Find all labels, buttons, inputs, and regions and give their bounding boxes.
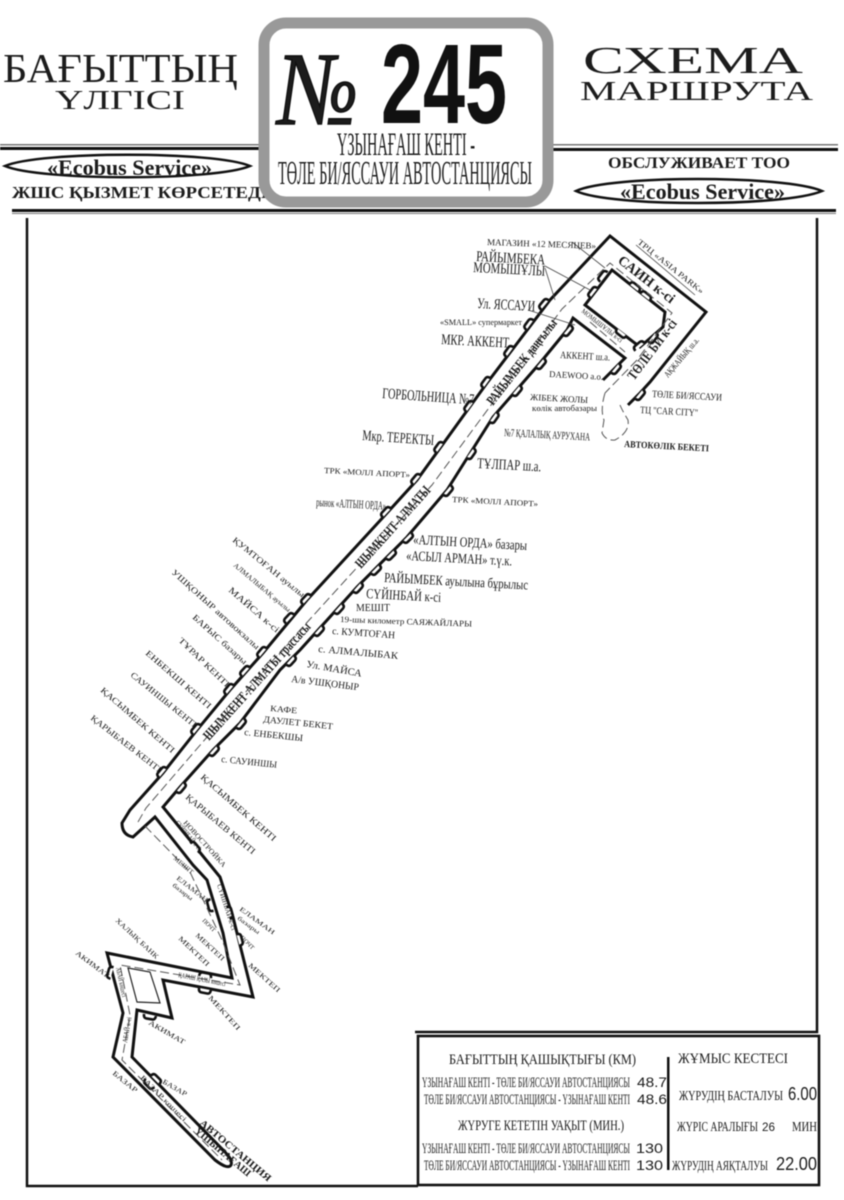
stop labels: central east: КАФЕ [270, 703, 298, 715]
stop labels: southern town: МЕКТЕП [177, 935, 211, 968]
stop labels: north-west upright: «SMALL» супермаркет [440, 318, 523, 327]
table divider [667, 1057, 670, 1170]
header: left title: БАҒЫТТЫҢ [3, 45, 238, 91]
stop labels: southern town: ЕЛАМАН [238, 906, 276, 937]
stop labels: southern town: АКИМАТ [147, 1019, 187, 1047]
header: left title [3, 45, 238, 115]
inner city block [585, 270, 665, 347]
operator badge right (Russian): ОБСЛУЖИВАЕТ ТОО [608, 155, 790, 172]
travel time section: 130 [636, 1140, 663, 1156]
road name: Momyshuly: МОМЫШҰЛЫ к-сі [580, 307, 624, 344]
stop labels: southern town: ПОЧТ [239, 935, 255, 952]
work schedule section: ЖҰМЫС КЕСТЕСІ [678, 1051, 788, 1067]
operator badge left (Kazakh): «Ecobus Service» [47, 155, 212, 180]
stop labels: central east: с. АЛМАЛЫБАК [318, 644, 399, 662]
stop labels: southern town: АВТОСТАНЦИЯ [197, 1118, 274, 1185]
dashed loop to auto station [602, 393, 628, 440]
stop labels: central east: «АЛТЫН ОРДА» базары [413, 533, 528, 554]
stop labels: southern town: ҮШЫНАҒАШ [192, 1126, 253, 1179]
operator badge right (Russian) [576, 155, 822, 204]
stop labels: north-west upright: РАЙЫМБЕКА [476, 248, 546, 269]
stop labels: east upright: ТҰЛПАР ш.а. [477, 456, 542, 475]
stop labels: southern town [74, 819, 282, 1185]
stop labels: southern town: базары [171, 882, 194, 902]
work schedule section: МИН [792, 1120, 817, 1135]
work schedule section: 22.00 [776, 1154, 817, 1174]
stop labels: southern town: ПОЧТ [201, 918, 216, 934]
road name: Shymkent-Almaty highway: ШЫМКЕНТ-АЛМАТЫ трассасы [201, 620, 314, 744]
work schedule section: ЖҮРІС АРАЛЫҒЫ [677, 1120, 758, 1135]
route name [278, 127, 532, 192]
stop labels: north-west diagonal: МАЙСА к-сі [227, 585, 282, 635]
road name: Tole bi: ТӨЛЕ БИ к-сі [625, 317, 681, 383]
stop labels: southern town: БАЗАР [161, 1078, 188, 1098]
table frame [418, 1036, 819, 1185]
southern road names: ҚАРАШ ҚАЗЫ көшесі [178, 971, 226, 988]
stop labels: central east: с. САУИНШЫ [221, 755, 277, 771]
leader lines [528, 242, 695, 325]
stop labels: southern town: БАЗАР [111, 1069, 139, 1095]
stop labels: central east: РАЙЫМБЕК ауылына бұрылыс [384, 569, 528, 594]
stop labels: southern town: МЕКТЕП [207, 994, 242, 1032]
southern road names [114, 819, 238, 1123]
travel time section: ҮЗЫНАҒАШ КЕНТІ - ТӨЛЕ БИ/ЯССАУИ АВТОСТАНЦИЯСЫ [422, 1141, 630, 1157]
work schedule section: ЖҮРУДІҢ БАСТАЛУЫ [679, 1089, 783, 1104]
stop labels: north-west diagonal: САУИНШЫ КЕНТІ [129, 670, 199, 729]
road name: Raiymbek ave: РАЙЫМБЕК даңғылы [483, 315, 561, 408]
stop labels: southern town: ХАЛЫҚ БАНК [114, 917, 160, 961]
work schedule section [672, 1051, 817, 1174]
map frame [27, 218, 817, 1186]
centre dashed line [120, 263, 672, 1160]
stop labels: southern town: АКИМАТ [74, 949, 111, 980]
road edge bumps [107, 270, 659, 1090]
distance section: ҮЗЫНАҒАШ КЕНТІ - ТӨЛЕ БИ/ЯССАУИ АВТОСТАНЦИЯСЫ [422, 1075, 630, 1091]
stop labels: north-west diagonal: АЛМАЛЫБАҚ ауылы [232, 561, 292, 614]
stop labels: north-west diagonal [89, 535, 307, 774]
distance section: ТӨЛЕ БИ/ЯССАУИ АВТОСТАНЦИЯСЫ - ҮЗЫНАҒАШ КЕНТІ [424, 1092, 630, 1108]
stop labels: central east: СҮЙІНБАЙ к-сі [366, 585, 442, 606]
route number plate [264, 21, 548, 202]
stop labels: east upright: ЖІБЕК ЖОЛЫ [530, 392, 588, 405]
operator badge left (Kazakh) [5, 155, 268, 202]
travel time section: ЖҮРУГЕ КЕТЕТІН УАҚЫТ (МИН.) [458, 1118, 624, 1134]
stop labels: central east: Ул. МАЙСА [305, 658, 364, 680]
stop labels: southern town: МЕКТЕП [194, 932, 226, 963]
stop labels: north-west diagonal: БАРЫС базары [191, 612, 250, 667]
stop labels: central east: с. ЕНБЕКШЫ [244, 728, 303, 744]
stop labels: central east: МЕШІТ [356, 603, 390, 614]
header: right title [580, 40, 814, 106]
stop labels: southern town: МЕШІТ [172, 855, 195, 876]
stop labels: north-west upright: ГОРБОЛЬНИЦА №7 [382, 386, 475, 408]
stop labels: north-west upright: ТРК «МОЛЛ АПОРТ» [324, 466, 410, 479]
stop labels: east upright: АККЕНТ ш.а. [560, 350, 610, 364]
stop labels: north-west diagonal: ҚУМТОҒАН ауылы [231, 535, 307, 599]
stop labels: central east: А/в УШҚОНЫР [291, 674, 360, 693]
stop labels: north-west diagonal: ЕНБЕКШІ КЕНТІ [144, 648, 214, 711]
southern road names: СҮЙІНБАЙ к-сі [173, 819, 203, 852]
stop labels: southern town: базары [236, 915, 261, 936]
southern road names: АБАЙ к-сі [121, 1016, 133, 1043]
southern road names: СҮЙІНБАЙ к-сі [215, 883, 238, 931]
stop labels: southern town: МЕКТЕП [247, 962, 282, 994]
stop labels: east upright: ТӨЛЕ БИ/ЯССАУИ [652, 389, 722, 404]
road outline [107, 236, 706, 1167]
header: right title: СХЕМА [583, 40, 804, 82]
distance section [422, 1052, 667, 1108]
stop labels: north-west diagonal: ҚАСЫМБЕК КЕНТІ [99, 685, 177, 755]
travel time section [422, 1118, 663, 1174]
header: left title: ҮЛГІСІ [55, 85, 185, 115]
stop labels: southern town: НОВОСТРОЙКА [182, 819, 228, 869]
stop labels: north-west upright: МАГАЗИН «12 МЕСЯЦЕВ» [487, 237, 596, 251]
operator badge left (Kazakh): ЖШС ҚЫЗМЕТ КӨРСЕТЕДІ [12, 183, 268, 202]
stop labels: east upright: ТЦ "CAR CITY" [640, 405, 698, 419]
route number symbol: № [276, 32, 358, 147]
header: right title: МАРШРУТА [580, 76, 814, 106]
stop labels: central east [221, 533, 528, 771]
southern road names: АБАЙ көшесі [114, 967, 128, 998]
stop labels: north-west upright: Мкр. ТЕРЕКТЫ [362, 428, 435, 449]
travel time section: 130 [636, 1157, 663, 1173]
road name: Saina: САИН к-сі [615, 253, 677, 307]
operator badge right (Russian): «Ecobus Service» [620, 179, 785, 204]
stop labels: top east diagonal [636, 238, 706, 379]
stop labels: central east: «АСЫЛ АРМАН» т.ү.к. [406, 549, 512, 570]
stop labels: top east diagonal: ТРЦ «ASIA PARK» [636, 238, 706, 296]
stop labels: east upright: №7 ҚАЛАЛЫҚ АУРУХАНА [504, 427, 590, 443]
distance section: 48.7 [637, 1074, 667, 1090]
stop labels: south-east diagonal: ҚАСЫМБЕК КЕНТІ [199, 772, 278, 843]
stop labels: north-west upright: МКР. АККЕНТ [441, 332, 510, 352]
stop labels: east upright: көлік автобазары [532, 404, 598, 413]
stop labels: north-west upright: МОМЫШҰЛЫ [473, 260, 546, 280]
route number: 245 [381, 21, 507, 147]
route name: ҮЗЫНАҒАШ КЕНТІ - [337, 127, 475, 163]
stop labels: east upright [452, 350, 722, 508]
header rules [0, 144, 838, 214]
work schedule section: 26 [762, 1120, 775, 1134]
stop labels: southern town: ЕЛАМАН [175, 875, 209, 904]
stop labels: east upright: DAEWOO а.о. [549, 369, 603, 382]
work schedule section: 6.00 [788, 1084, 817, 1104]
distance section: 48.6 [637, 1091, 667, 1107]
stop labels: north-west diagonal: УШҚОНЫР автовокзалы [170, 567, 262, 652]
stop labels: south-east diagonal: ҚАРЫБАЕВ КЕНТІ [184, 792, 258, 856]
stop labels: north-west upright: рынок «АЛТЫН ОРДА» [316, 495, 386, 513]
stop labels: north-west diagonal: ТҰРАР КЕНТІ [177, 635, 232, 689]
stop labels: top east diagonal: АҚЖАЙЫҚ ш.а. [662, 335, 701, 379]
stop labels: central east: 19-шы километр САЯЖАЙЛАРЫ [340, 614, 473, 629]
stop labels: east upright: АВТОКӨЛІК БЕКЕТІ [624, 440, 710, 454]
stop labels: east upright: ТРК «МОЛЛ АПОРТ» [452, 495, 538, 508]
stop labels: central east: с. КУМТОҒАН [332, 626, 395, 641]
travel time section: ТӨЛЕ БИ/ЯССАУИ АВТОСТАНЦИЯСЫ - ҮЗЫНАҒАШ КЕНТІ [424, 1158, 630, 1174]
stop labels: central east: ДАУЛЕТ БЕКЕТ [263, 714, 334, 731]
southern road names: БАЗАР көшесі [139, 1074, 188, 1123]
stop labels: south-east diagonal [184, 772, 278, 856]
stop labels: north-west upright [316, 237, 596, 513]
work schedule section: ЖҮРУДІҢ АЯҚТАЛУЫ [672, 1159, 768, 1174]
route map [107, 236, 706, 1167]
info table [418, 1036, 819, 1185]
distance section: БАҒЫТТЫҢ ҚАШЫҚТЫҒЫ (КМ) [449, 1052, 636, 1068]
stop labels: north-west upright: Ул. ЯССАУИ [477, 296, 536, 315]
stop labels: north-west diagonal: ҚАРЫБАЕВ КЕНТІ [89, 713, 164, 774]
southern inner block [128, 968, 160, 1003]
road name: Shymkent-Almaty upper: ШЫМКЕНТ-АЛМАТЫ [353, 483, 434, 572]
